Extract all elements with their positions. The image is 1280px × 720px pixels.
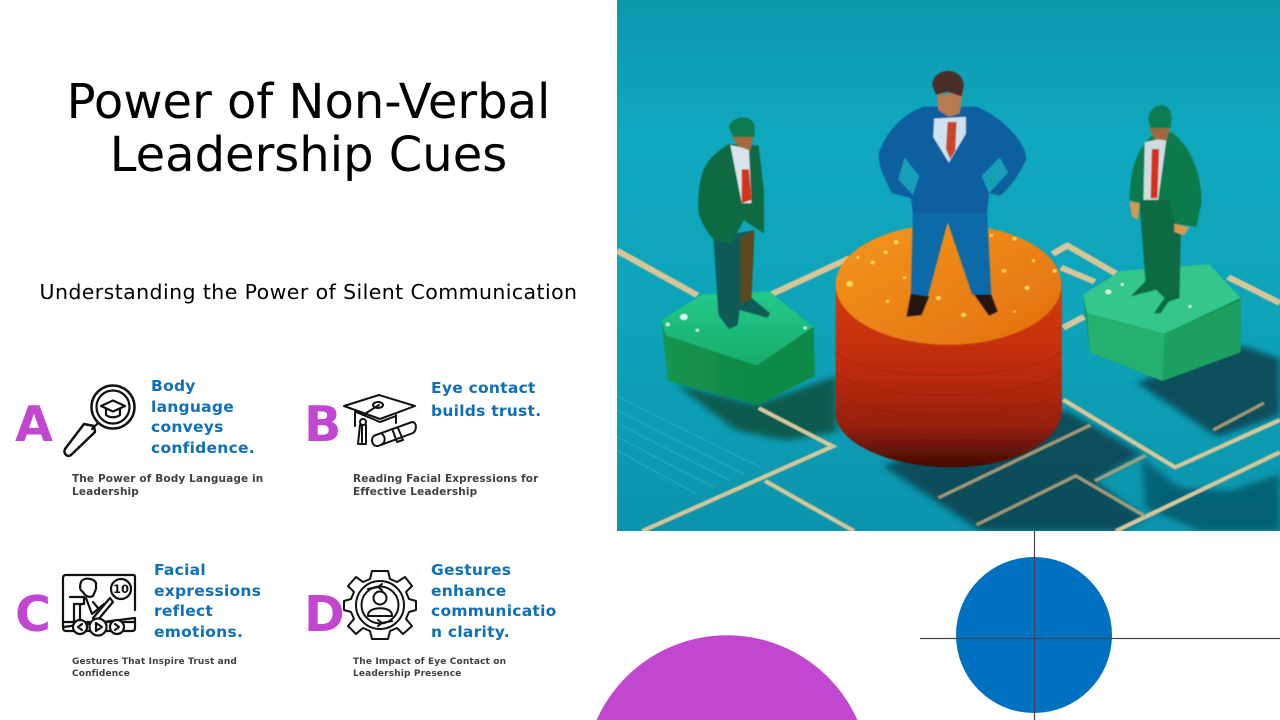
heading A: confidence.	[151, 438, 255, 456]
title: Power of Non-Verbal	[67, 74, 550, 130]
caption D: The Impact of Eye Contact on	[353, 657, 506, 667]
heading D: Gestures	[431, 561, 511, 579]
item C	[15, 561, 261, 678]
heading A: language	[151, 398, 234, 416]
circuit lines	[617, 246, 1280, 531]
heading D: enhance	[431, 582, 507, 600]
heading C: Facial	[154, 561, 206, 579]
right pedestal	[1083, 264, 1241, 381]
icon: video player with presenter	[62, 574, 136, 637]
center blue figure	[879, 71, 1026, 317]
crosshair lines	[920, 531, 1280, 720]
letter C: C	[15, 586, 51, 643]
item B	[304, 379, 541, 498]
decorative circle: blue	[956, 557, 1112, 713]
title	[67, 74, 550, 183]
heading D: communicatio	[431, 602, 557, 620]
letter A: A	[15, 396, 53, 453]
heading B: builds trust.	[431, 402, 541, 420]
heading D: n clarity.	[431, 622, 510, 640]
heading C: reflect	[154, 602, 213, 620]
caption B: Reading Facial Expressions for	[353, 473, 538, 485]
letter B: B	[304, 396, 341, 453]
left green figure	[698, 117, 770, 329]
item A	[15, 377, 263, 498]
decorative circle: purple	[584, 635, 870, 720]
caption C: Gestures That Inspire Trust and	[72, 657, 237, 667]
caption C	[72, 657, 237, 678]
right green figure	[1129, 105, 1201, 313]
heading D	[431, 561, 557, 640]
icon: graduation cap with diploma	[343, 394, 417, 448]
heading A: Body	[151, 377, 196, 395]
caption B: Effective Leadership	[353, 486, 477, 498]
letter D: D	[304, 586, 345, 643]
heading A	[151, 377, 255, 456]
caption C: Confidence	[72, 668, 130, 678]
heading C	[154, 561, 261, 640]
heading C: emotions.	[154, 622, 243, 640]
subtitle: Understanding the Power of Silent Communication	[40, 280, 577, 304]
board texture	[617, 396, 761, 494]
shadows	[676, 345, 1280, 531]
title: Leadership Cues	[110, 127, 507, 183]
caption B	[353, 473, 538, 498]
icon: video player with presenter: 10	[113, 582, 129, 596]
heading B: Eye contact	[431, 379, 536, 397]
orange cylinder	[836, 224, 1062, 467]
icon: gear with person	[343, 570, 417, 640]
heading C: expressions	[154, 582, 261, 600]
caption D: Leadership Presence	[353, 668, 461, 678]
caption A	[72, 473, 263, 498]
caption A: Leadership	[72, 486, 139, 498]
heading B	[431, 379, 541, 420]
photo: leader figurines on a circuit board	[617, 0, 1280, 531]
item D	[304, 561, 557, 678]
caption A: The Power of Body Language in	[72, 473, 263, 485]
icon: magnifier with graduation cap	[63, 384, 136, 458]
left pedestal	[661, 291, 815, 405]
heading A: conveys	[151, 418, 224, 436]
caption D	[353, 657, 506, 678]
